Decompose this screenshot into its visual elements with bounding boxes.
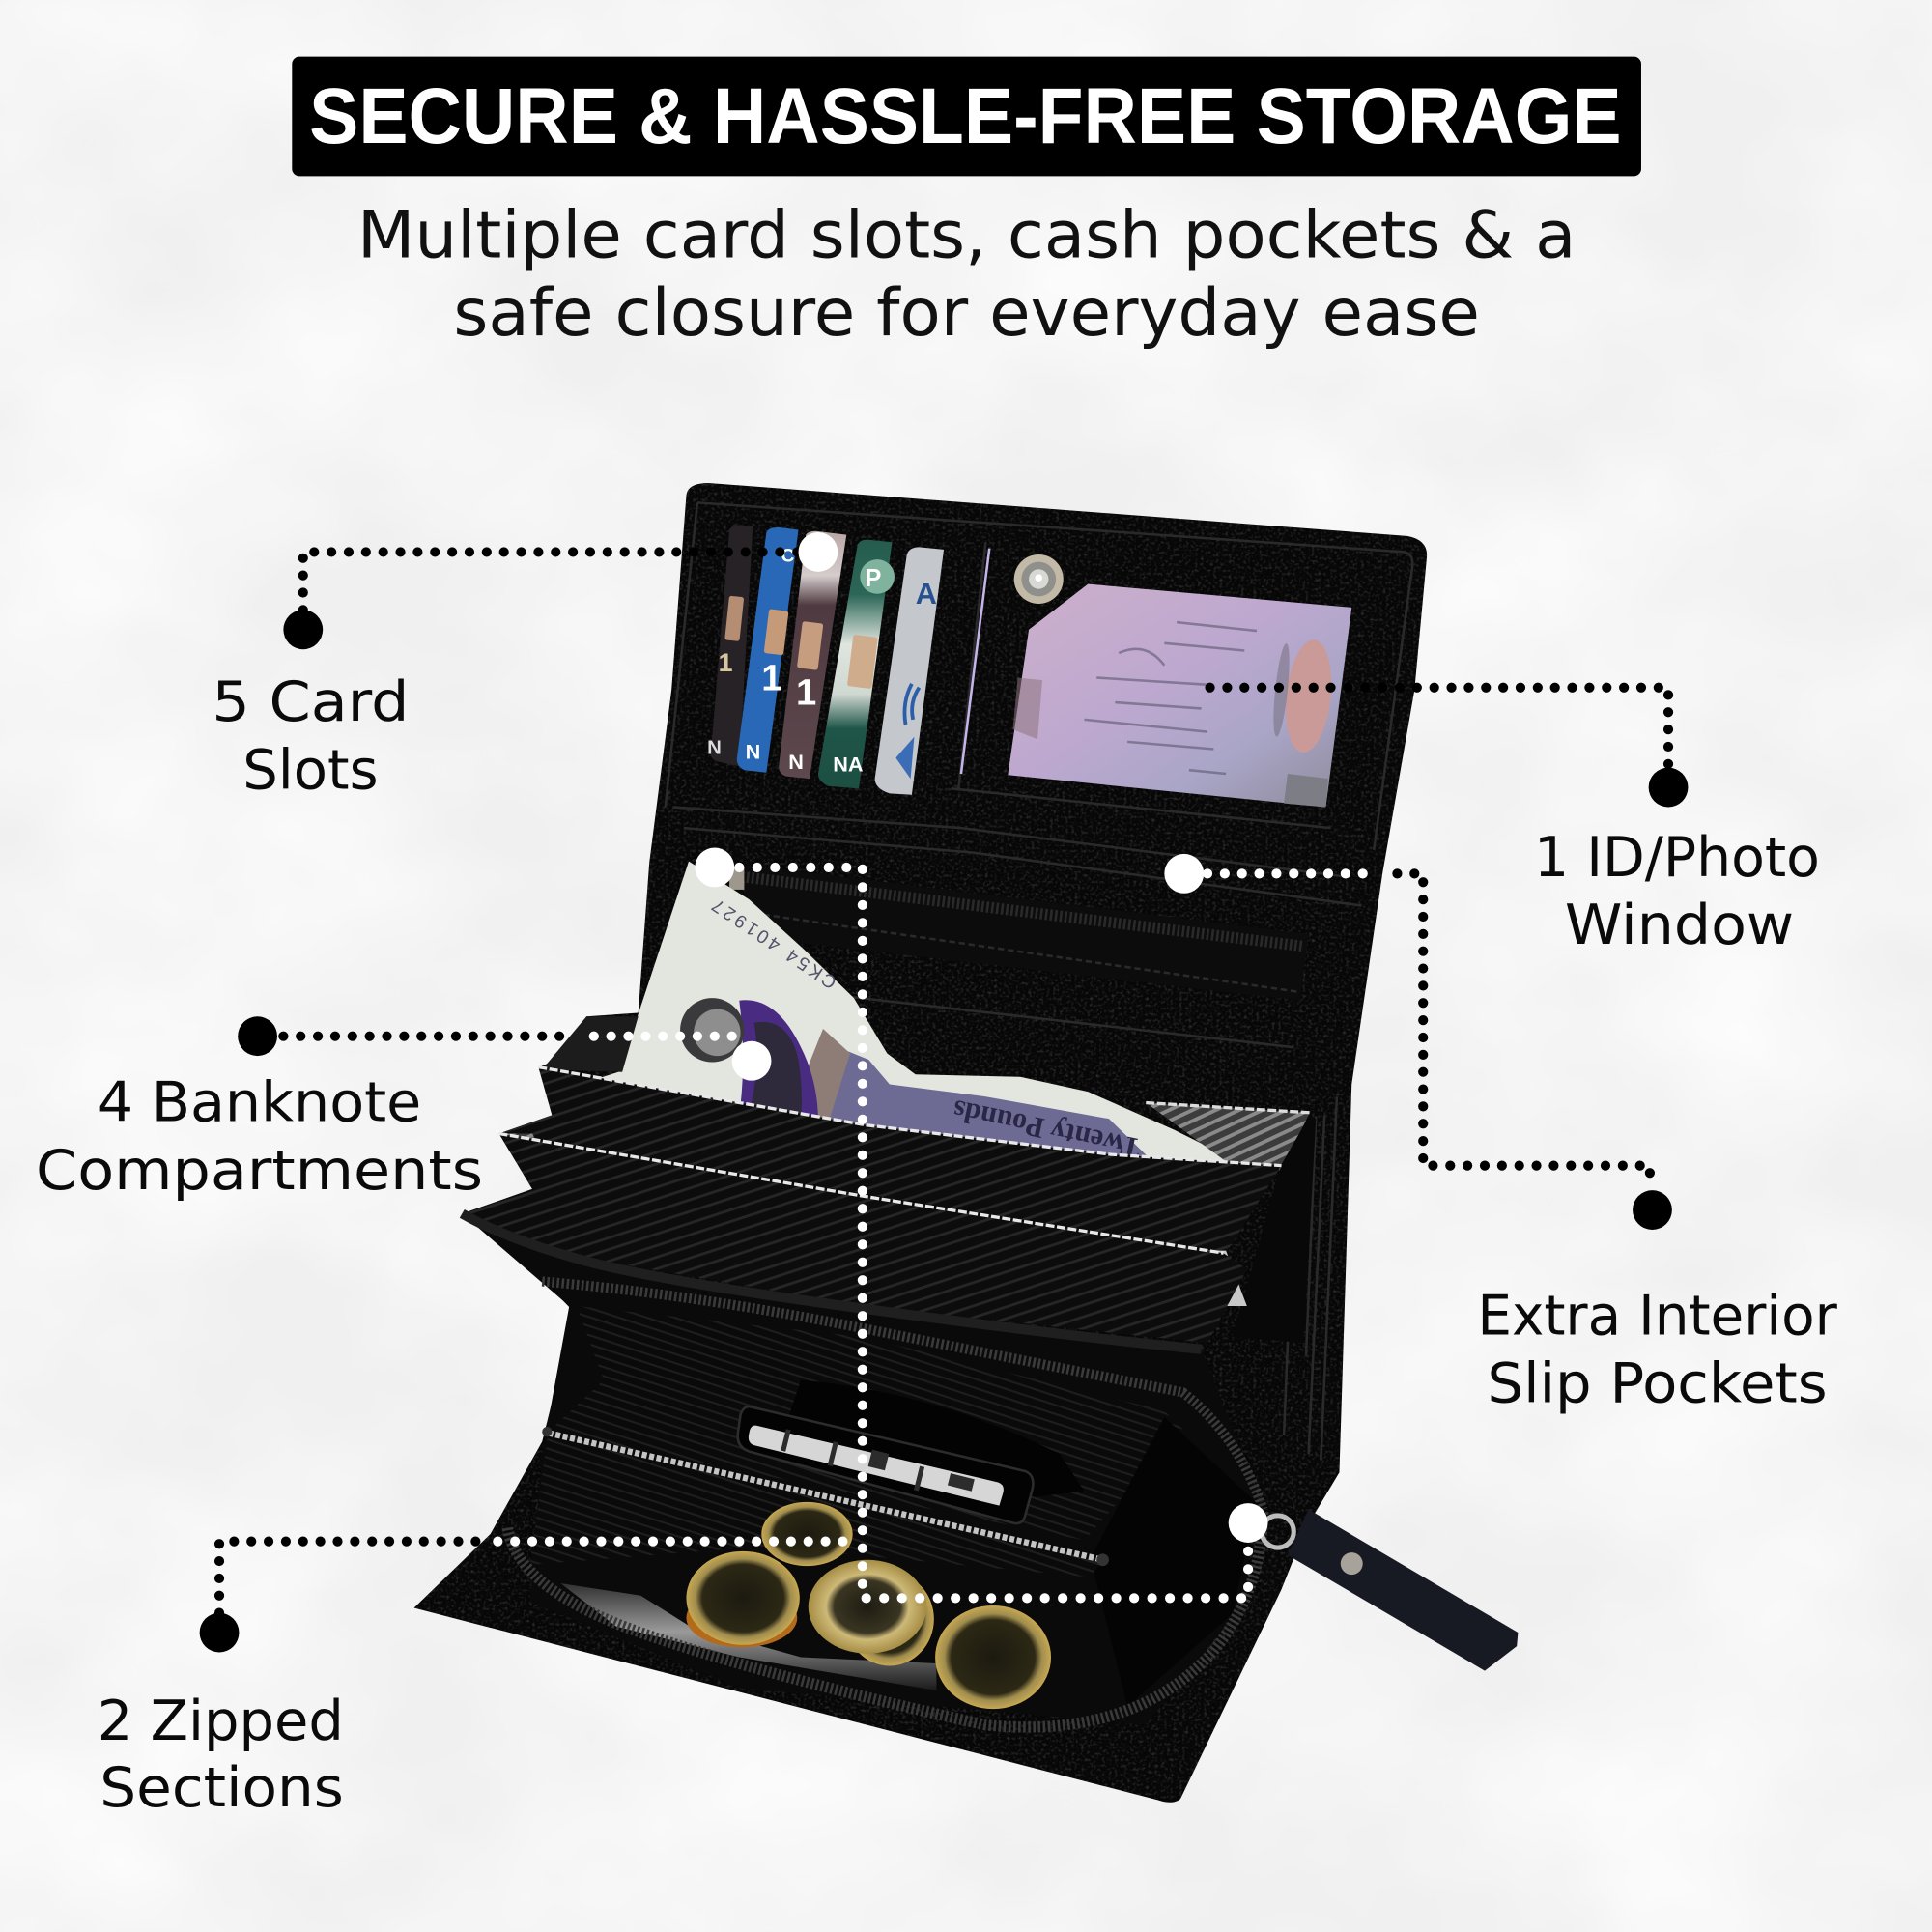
pocket front 1 <box>499 1067 1282 1253</box>
callout: 4 banknote compartments: 4 Banknote <box>98 1070 421 1135</box>
callout: ID photo window <box>1210 688 1820 957</box>
card 4: NA <box>833 752 864 776</box>
card 4: P <box>865 565 881 592</box>
wallet photo <box>407 474 1518 1811</box>
inner divider <box>529 1427 1109 1577</box>
card slots <box>707 525 989 795</box>
card 3: N <box>788 750 804 774</box>
callout: ID photo window: Window <box>1565 893 1794 957</box>
card 4 <box>818 540 895 788</box>
callout: 2 zipped sections: Sections <box>99 1755 344 1820</box>
card 2: 1 <box>761 657 782 698</box>
snap button <box>1014 554 1064 604</box>
callout: 4 banknote compartments <box>36 1016 771 1203</box>
card 2 <box>737 527 799 773</box>
card 5 <box>875 547 944 795</box>
card 1: 1 <box>719 648 733 677</box>
title banner: SECURE & HASSLE-FREE STORAGE <box>309 72 1622 160</box>
coins <box>686 1502 1051 1709</box>
callout: 5 card slots: Slots <box>242 737 379 802</box>
coin tray <box>560 1583 936 1690</box>
wallet body <box>414 483 1427 1803</box>
card 2: C <box>781 547 795 567</box>
card 1: N <box>707 738 722 759</box>
pocket front 2 <box>462 1133 1247 1343</box>
subtitle <box>357 197 1576 351</box>
leather stitching <box>666 502 1412 1460</box>
zip curve <box>508 1509 1263 1727</box>
leather grain <box>407 474 1441 1811</box>
callout: 5 card slots: 5 Card <box>212 669 409 734</box>
hidden card edge <box>961 549 989 774</box>
banknote: Twenty Pounds <box>950 1094 1144 1165</box>
banknote: CK54 401927 <box>709 895 840 992</box>
callout: extra interior slip pockets: Extra Interior <box>1477 1283 1837 1348</box>
callout: 2 zipped sections <box>98 848 1268 1820</box>
banknote compartments <box>462 1016 1316 1343</box>
callout: 5 card slots <box>212 532 838 802</box>
key fob <box>738 1380 1084 1523</box>
card 1 <box>707 525 753 766</box>
card 3 <box>779 531 846 779</box>
callout: ID photo window: 1 ID/Photo <box>1534 825 1820 890</box>
callout: extra interior slip pockets <box>1164 854 1837 1416</box>
callout: 4 banknote compartments: Compartments <box>36 1138 483 1203</box>
banknote <box>542 862 1238 1182</box>
pocket gap <box>499 1133 579 1213</box>
subtitle: safe closure for everyday ease <box>453 274 1480 351</box>
back compartment <box>1146 1103 1310 1171</box>
zip compartment <box>462 1213 1263 1725</box>
card 3: 1 <box>796 672 816 714</box>
callout: extra interior slip pockets: Slip Pockets <box>1488 1351 1828 1416</box>
card 2: N <box>746 740 760 764</box>
card 5: A <box>916 578 937 611</box>
ID photo window <box>1008 584 1351 807</box>
callout: 2 zipped sections: 2 Zipped <box>98 1689 344 1753</box>
zip pocket <box>729 865 1309 1001</box>
subtitle: Multiple card slots, cash pockets & a <box>357 197 1576 273</box>
zip pull strap <box>1262 1509 1518 1671</box>
